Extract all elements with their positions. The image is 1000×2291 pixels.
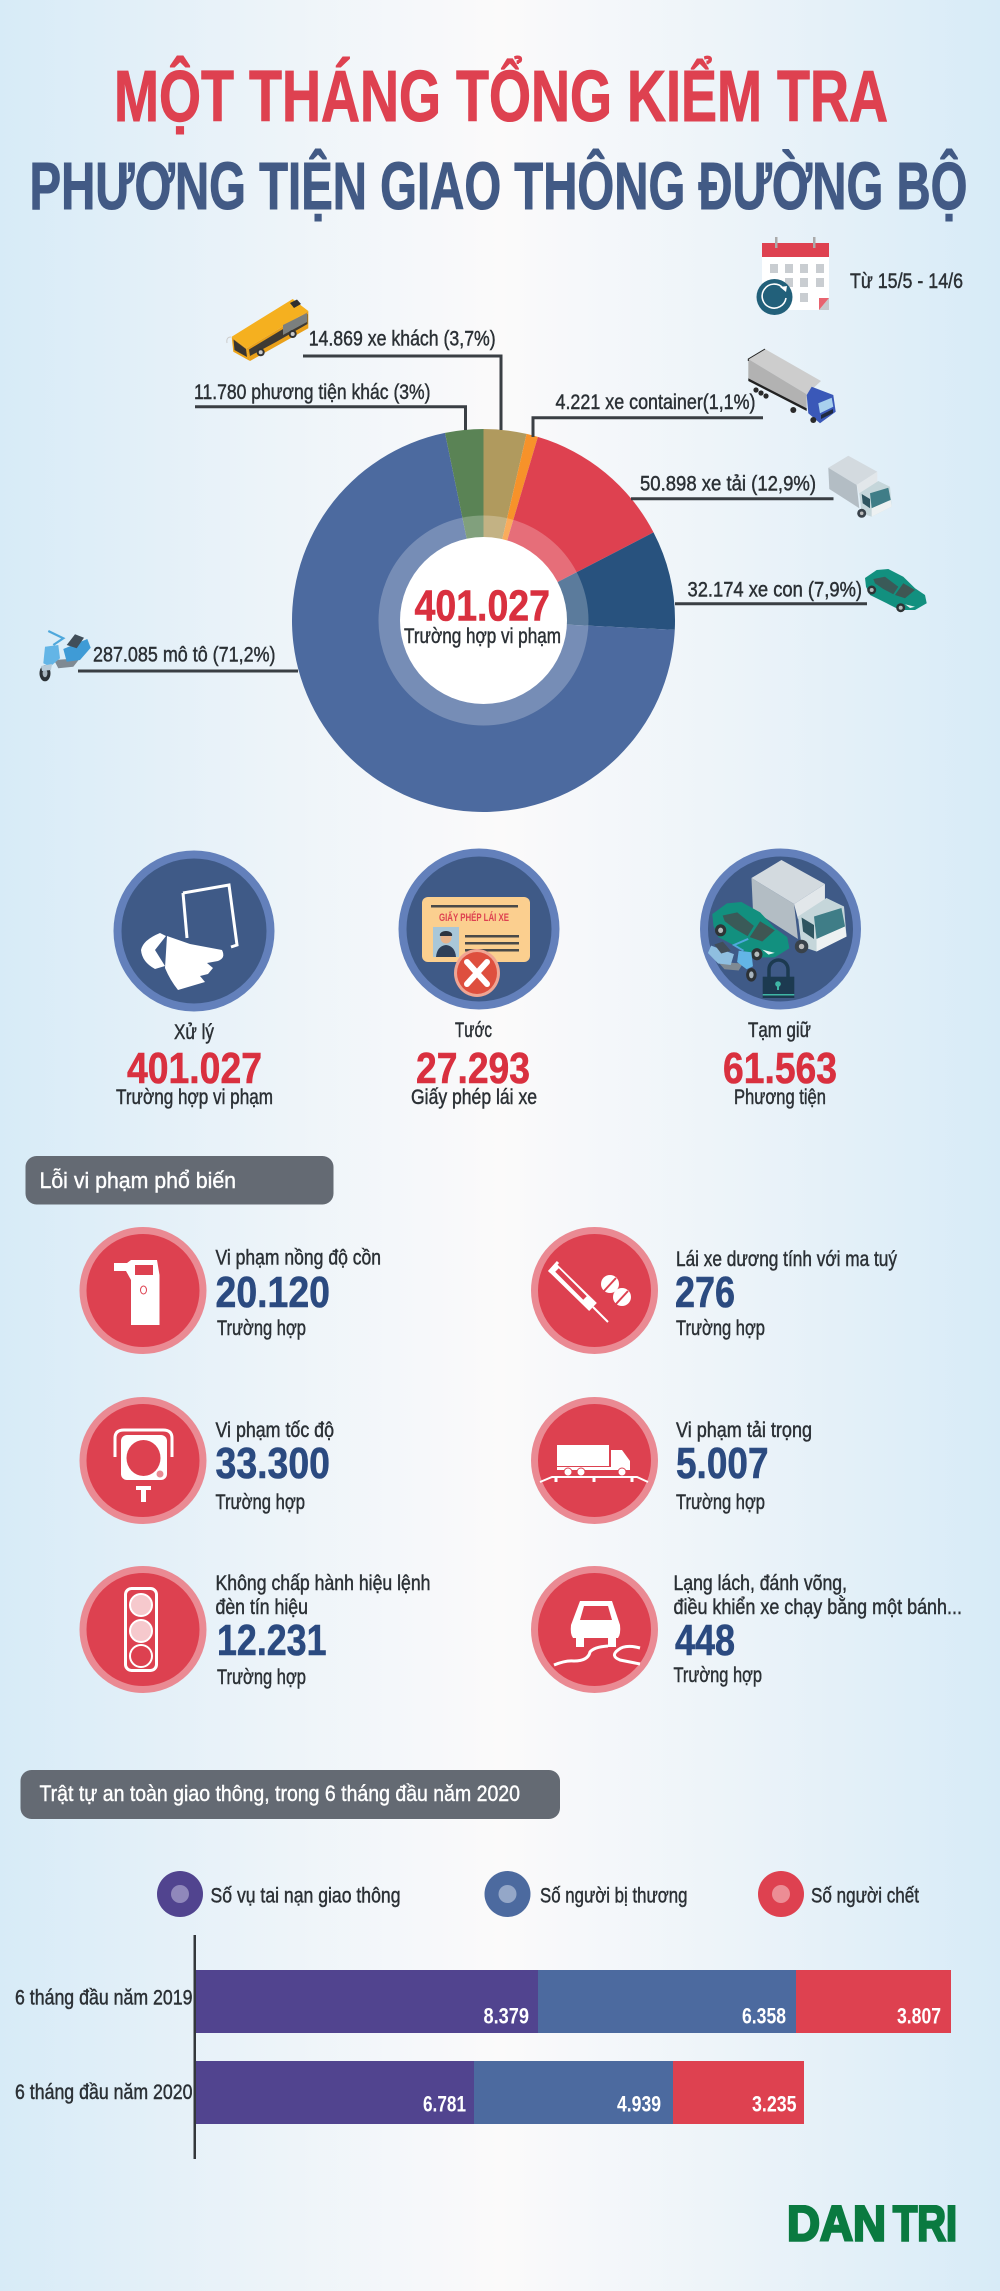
icon: calendar: [756, 237, 829, 315]
stat: tước: Tước: [455, 1019, 492, 1042]
icon: truck on scale: [534, 1400, 654, 1520]
slice: xe tải: [484, 437, 654, 620]
violation: ma tuý: Lái xe dương tính với ma tuý: [676, 1248, 897, 1271]
icon: hand with card: [118, 854, 270, 1008]
icon: bus: [227, 299, 308, 361]
callout: xe tải: 50.898 xe tải (12,9%): [640, 473, 816, 496]
stat: tạm giữ: Tạm giữ: [748, 1019, 811, 1042]
violation: nồng độ cồn: Vi phạm nồng độ cồn: [216, 1247, 381, 1270]
heading: common violations: [26, 1156, 334, 1204]
callout: xe khách: [303, 328, 501, 430]
callout: mô tô: 287.085 mô tô (71,2%): [93, 644, 276, 667]
stat: tạm giữ: 61.563: [723, 1044, 837, 1093]
icon: car: [865, 569, 927, 612]
stat: tước: Giấy phép lái xe: [411, 1086, 537, 1109]
legend: injured: Số người bị thương: [540, 1884, 688, 1908]
icon: scooter: [40, 631, 91, 681]
centre caption: Trường hợp vi phạm: [404, 625, 561, 648]
legend: accidents: Số vụ tai nạn giao thông: [210, 1884, 400, 1908]
violation: nồng độ cồn: Trường hợp: [217, 1317, 306, 1340]
logo: TRÍ: [893, 2195, 958, 2251]
violation: đèn tín hiệu: Không chấp hành hiệu lệnh: [216, 1572, 430, 1595]
stat: xử lý: 401.027: [127, 1044, 262, 1093]
row 2019: 8.379: [484, 2004, 529, 2029]
violation: đèn tín hiệu: Trường hợp: [217, 1666, 306, 1689]
stat: xử lý: [116, 854, 273, 1109]
callout: xe con: 32.174 xe con (7,9%): [688, 579, 862, 602]
stat: xử lý: Trường hợp vi phạm: [116, 1086, 273, 1109]
axis: [194, 1935, 196, 2159]
chart legend: [157, 1871, 919, 1917]
icon: speed camera: [83, 1400, 203, 1520]
icon: impounded vehicles: [704, 852, 857, 1006]
stat: xử lý: Xử lý: [174, 1021, 214, 1044]
violation: lạng lách: [534, 1570, 962, 1690]
slice: xe con: [484, 532, 675, 630]
violation: tốc độ: 33.300: [216, 1439, 330, 1488]
legend: deaths: [758, 1871, 919, 1917]
violation: tốc độ: Trường hợp: [216, 1491, 305, 1514]
stat: tước: [402, 852, 556, 1109]
row 2019: 3.807: [897, 2004, 941, 2029]
date text: Từ 15/5 - 14/6: [850, 270, 963, 293]
logo: [788, 2205, 956, 2242]
legend: deaths: Số người chết: [811, 1884, 919, 1908]
inner translucent ring: [378, 516, 588, 726]
panel: summary stats: [116, 852, 857, 1109]
violation: tải trọng: Vi phạm tải trọng: [676, 1419, 812, 1442]
violation: ma tuý: Trường hợp: [676, 1317, 765, 1340]
icon: breathalyzer: [83, 1230, 203, 1350]
row 2020: 4.939: [617, 2092, 661, 2117]
legend: accidents: [157, 1871, 400, 1917]
stat: tạm giữ: [704, 852, 857, 1109]
violation: đèn tín hiệu: 12.231: [217, 1616, 326, 1665]
icon: syringe and pills: [534, 1230, 654, 1350]
slice: xe khách: [484, 429, 527, 620]
callout: xe khách: 14.869 xe khách (3,7%): [309, 328, 496, 350]
violation: đèn tín hiệu: đèn tín hiệu: [216, 1596, 308, 1619]
slice: xe container: [484, 434, 538, 620]
callout: phương tiện khác: 11.780 phương tiện khác (3%): [194, 381, 430, 404]
row 2019: [15, 1970, 951, 2033]
callout: xe container: [533, 391, 763, 437]
legend: injured: [484, 1871, 688, 1917]
panel: violations: [83, 1230, 962, 1690]
heading: traffic safety: Trật tự an toàn giao thông, trong 6 tháng đầu năm 2020: [40, 1781, 520, 1806]
violation: tải trọng: 5.007: [676, 1439, 768, 1488]
row 2020: 6.781: [423, 2092, 466, 2117]
violation: tải trọng: [534, 1400, 812, 1520]
callout: xe container: 4.221 xe container(1,1%): [556, 391, 756, 414]
centre total: 401.027: [414, 582, 550, 631]
callout: phương tiện khác: [194, 381, 466, 430]
row 2020: 3.235: [752, 2092, 796, 2117]
row 2019: 6 tháng đầu năm 2019: [15, 1987, 192, 2010]
violation: lạng lách: Lạng lách, đánh võng,: [674, 1572, 847, 1595]
icon: driving licence: [402, 852, 556, 1006]
icon: traffic light: [83, 1570, 203, 1690]
violation: ma tuý: 276: [675, 1268, 735, 1317]
slice: phương tiện khác: [445, 429, 484, 620]
heading: traffic safety: [20, 1770, 560, 1819]
logo: DÂN: [787, 2195, 886, 2251]
violation: lạng lách: Trường hợp: [674, 1664, 762, 1687]
date block: [756, 237, 963, 315]
icon: skidding car: [534, 1570, 654, 1690]
violation: ma tuý: [534, 1230, 897, 1350]
violation: tốc độ: Vi phạm tốc độ: [216, 1419, 334, 1442]
donut chart: [292, 429, 675, 812]
icon: container truck: [748, 349, 836, 423]
violation: nồng độ cồn: [83, 1230, 381, 1350]
violation: nồng độ cồn: 20.120: [216, 1268, 330, 1317]
row 2020: 6 tháng đầu năm 2020: [15, 2081, 192, 2104]
inner hole: [400, 537, 567, 704]
row 2019: 6.358: [742, 2004, 786, 2029]
violation: tốc độ: [83, 1400, 334, 1520]
bar chart: [15, 1935, 951, 2159]
violation: đèn tín hiệu: [83, 1570, 430, 1690]
stat: tạm giữ: Phương tiện: [734, 1086, 826, 1109]
heading: common violations: Lỗi vi phạm phổ biến: [40, 1168, 236, 1193]
icon: driving licence: GIẤY PHÉP LÁI XE: [439, 911, 509, 924]
title: [30, 56, 968, 224]
row 2020: [15, 2061, 804, 2124]
violation: tải trọng: Trường hợp: [676, 1491, 765, 1514]
icon: box truck: [828, 456, 892, 518]
stat: tước: 27.293: [416, 1044, 530, 1093]
violation: lạng lách: 448: [675, 1616, 735, 1665]
slice: mô tô: [292, 433, 675, 812]
